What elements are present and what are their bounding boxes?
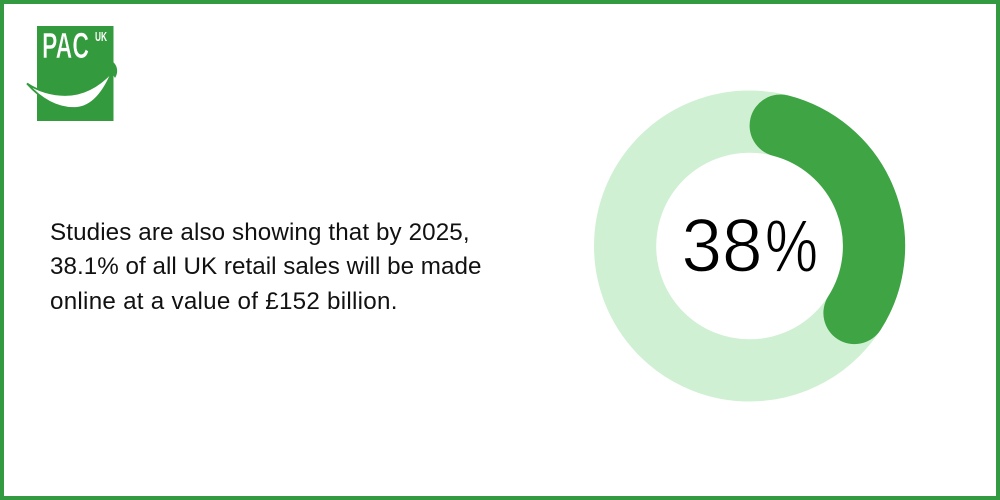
body text: 38.1% of all UK retail sales will be made	[50, 253, 481, 280]
logo: PAC UK: UK	[95, 30, 107, 44]
body text: Studies are also showing that by 2025,	[50, 218, 470, 246]
body text	[50, 218, 481, 315]
body text: online at a value of £152 billion.	[50, 288, 398, 315]
donut chart: 38%: %	[765, 204, 818, 288]
logo: PAC UK	[26, 25, 118, 121]
donut chart: 38%: 38	[682, 204, 762, 288]
logo: PAC UK: PAC	[42, 25, 89, 66]
donut chart: 38%	[594, 90, 906, 402]
